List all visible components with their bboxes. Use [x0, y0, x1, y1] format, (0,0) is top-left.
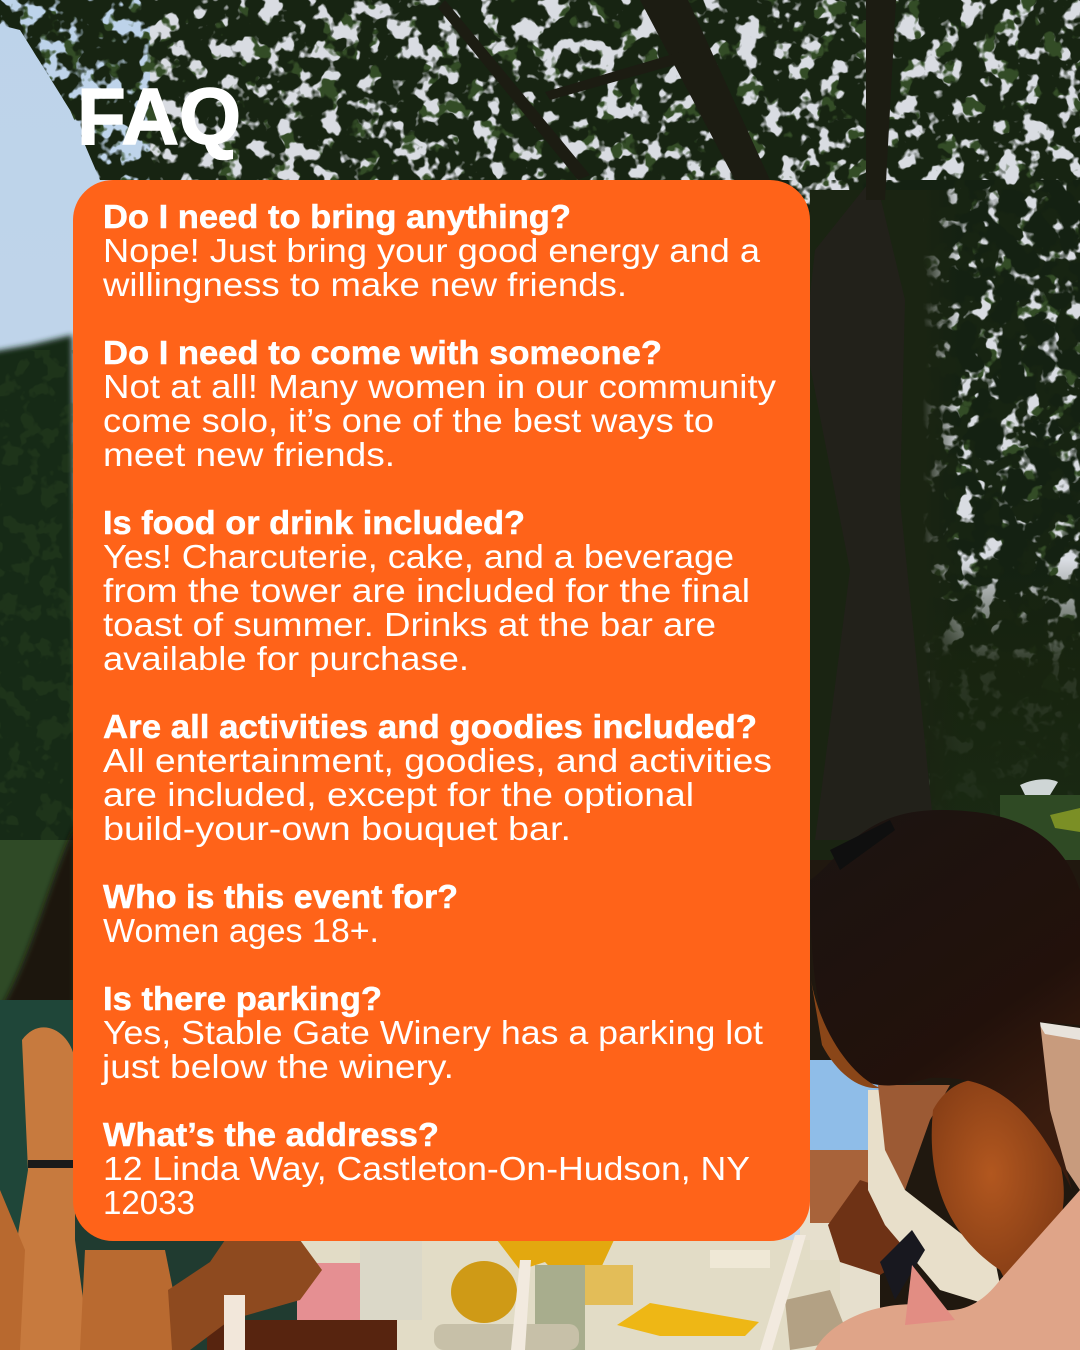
question: food or drink: Is food or drink included?: [103, 504, 525, 541]
question: activities and goodies: [103, 708, 772, 847]
woman with long dark hair, white top and necklace: [810, 808, 1080, 1310]
question: food or drink: toast of summer. Drinks at the bar are: [103, 606, 716, 643]
question: bring anything: [102, 198, 761, 303]
question: bring anything: Nope! Just bring your good energy and a: [103, 232, 761, 269]
table with drinks and flowers: [207, 1240, 850, 1350]
tree canopy leaves: [0, 0, 1080, 880]
question: activities and goodies: All entertainment, goodies, and activities: [103, 742, 772, 779]
pale sky behind the canopy: [150, 0, 1080, 850]
question: who is it for: Women ages 18+.: [103, 912, 379, 949]
question: come with someone: meet new friends.: [103, 436, 395, 473]
question: bring anything: Do I need to bring anything?: [103, 198, 571, 235]
question: food or drink: Yes! Charcuterie, cake, and a beverage: [103, 538, 734, 575]
question: come with someone: Not at all! Many women in our community: [103, 368, 777, 405]
question: parking: just below the winery.: [101, 1048, 454, 1085]
question: food or drink: available for purchase.: [103, 640, 469, 677]
question: activities and goodies: are included, except for the optional: [103, 776, 694, 813]
question: come with someone: [103, 334, 777, 473]
question: come with someone: come solo, it’s one of the best ways to: [103, 402, 714, 439]
arms at the left of the table: [0, 1000, 322, 1350]
lower backdrop behind the seated women: [0, 840, 1080, 1350]
question: food or drink: from the tower are included for the final: [103, 572, 750, 609]
foreground hand, arm and smartwatch: [511, 1190, 1080, 1350]
question: bring anything: willingness to make new friends.: [102, 266, 627, 303]
question: who is it for: Who is this event for?: [103, 878, 458, 915]
question: parking: Yes, Stable Gate Winery has a parking lot: [103, 1014, 763, 1051]
question: who is it for: [103, 878, 458, 949]
question: parking: Is there parking?: [103, 980, 382, 1017]
question: food or drink: [103, 504, 750, 677]
question: parking: [101, 980, 763, 1085]
tree trunk and branches: [438, 0, 935, 840]
question: activities and goodies: build-your-own bouquet bar.: [103, 810, 571, 847]
left tree and shrubs: [0, 335, 79, 1090]
question: activities and goodies: Are all activities and goodies included?: [103, 708, 757, 745]
question: address: 12033: [103, 1184, 195, 1221]
question: address: What’s the address?: [103, 1116, 439, 1153]
card background: [73, 180, 810, 1241]
question: address: 12 Linda Way, Castleton-On-Hudson, NY: [103, 1150, 750, 1187]
title: FAQ: FAQ: [77, 72, 241, 161]
question: come with someone: Do I need to come with someone?: [103, 334, 662, 371]
question: address: [103, 1116, 750, 1221]
